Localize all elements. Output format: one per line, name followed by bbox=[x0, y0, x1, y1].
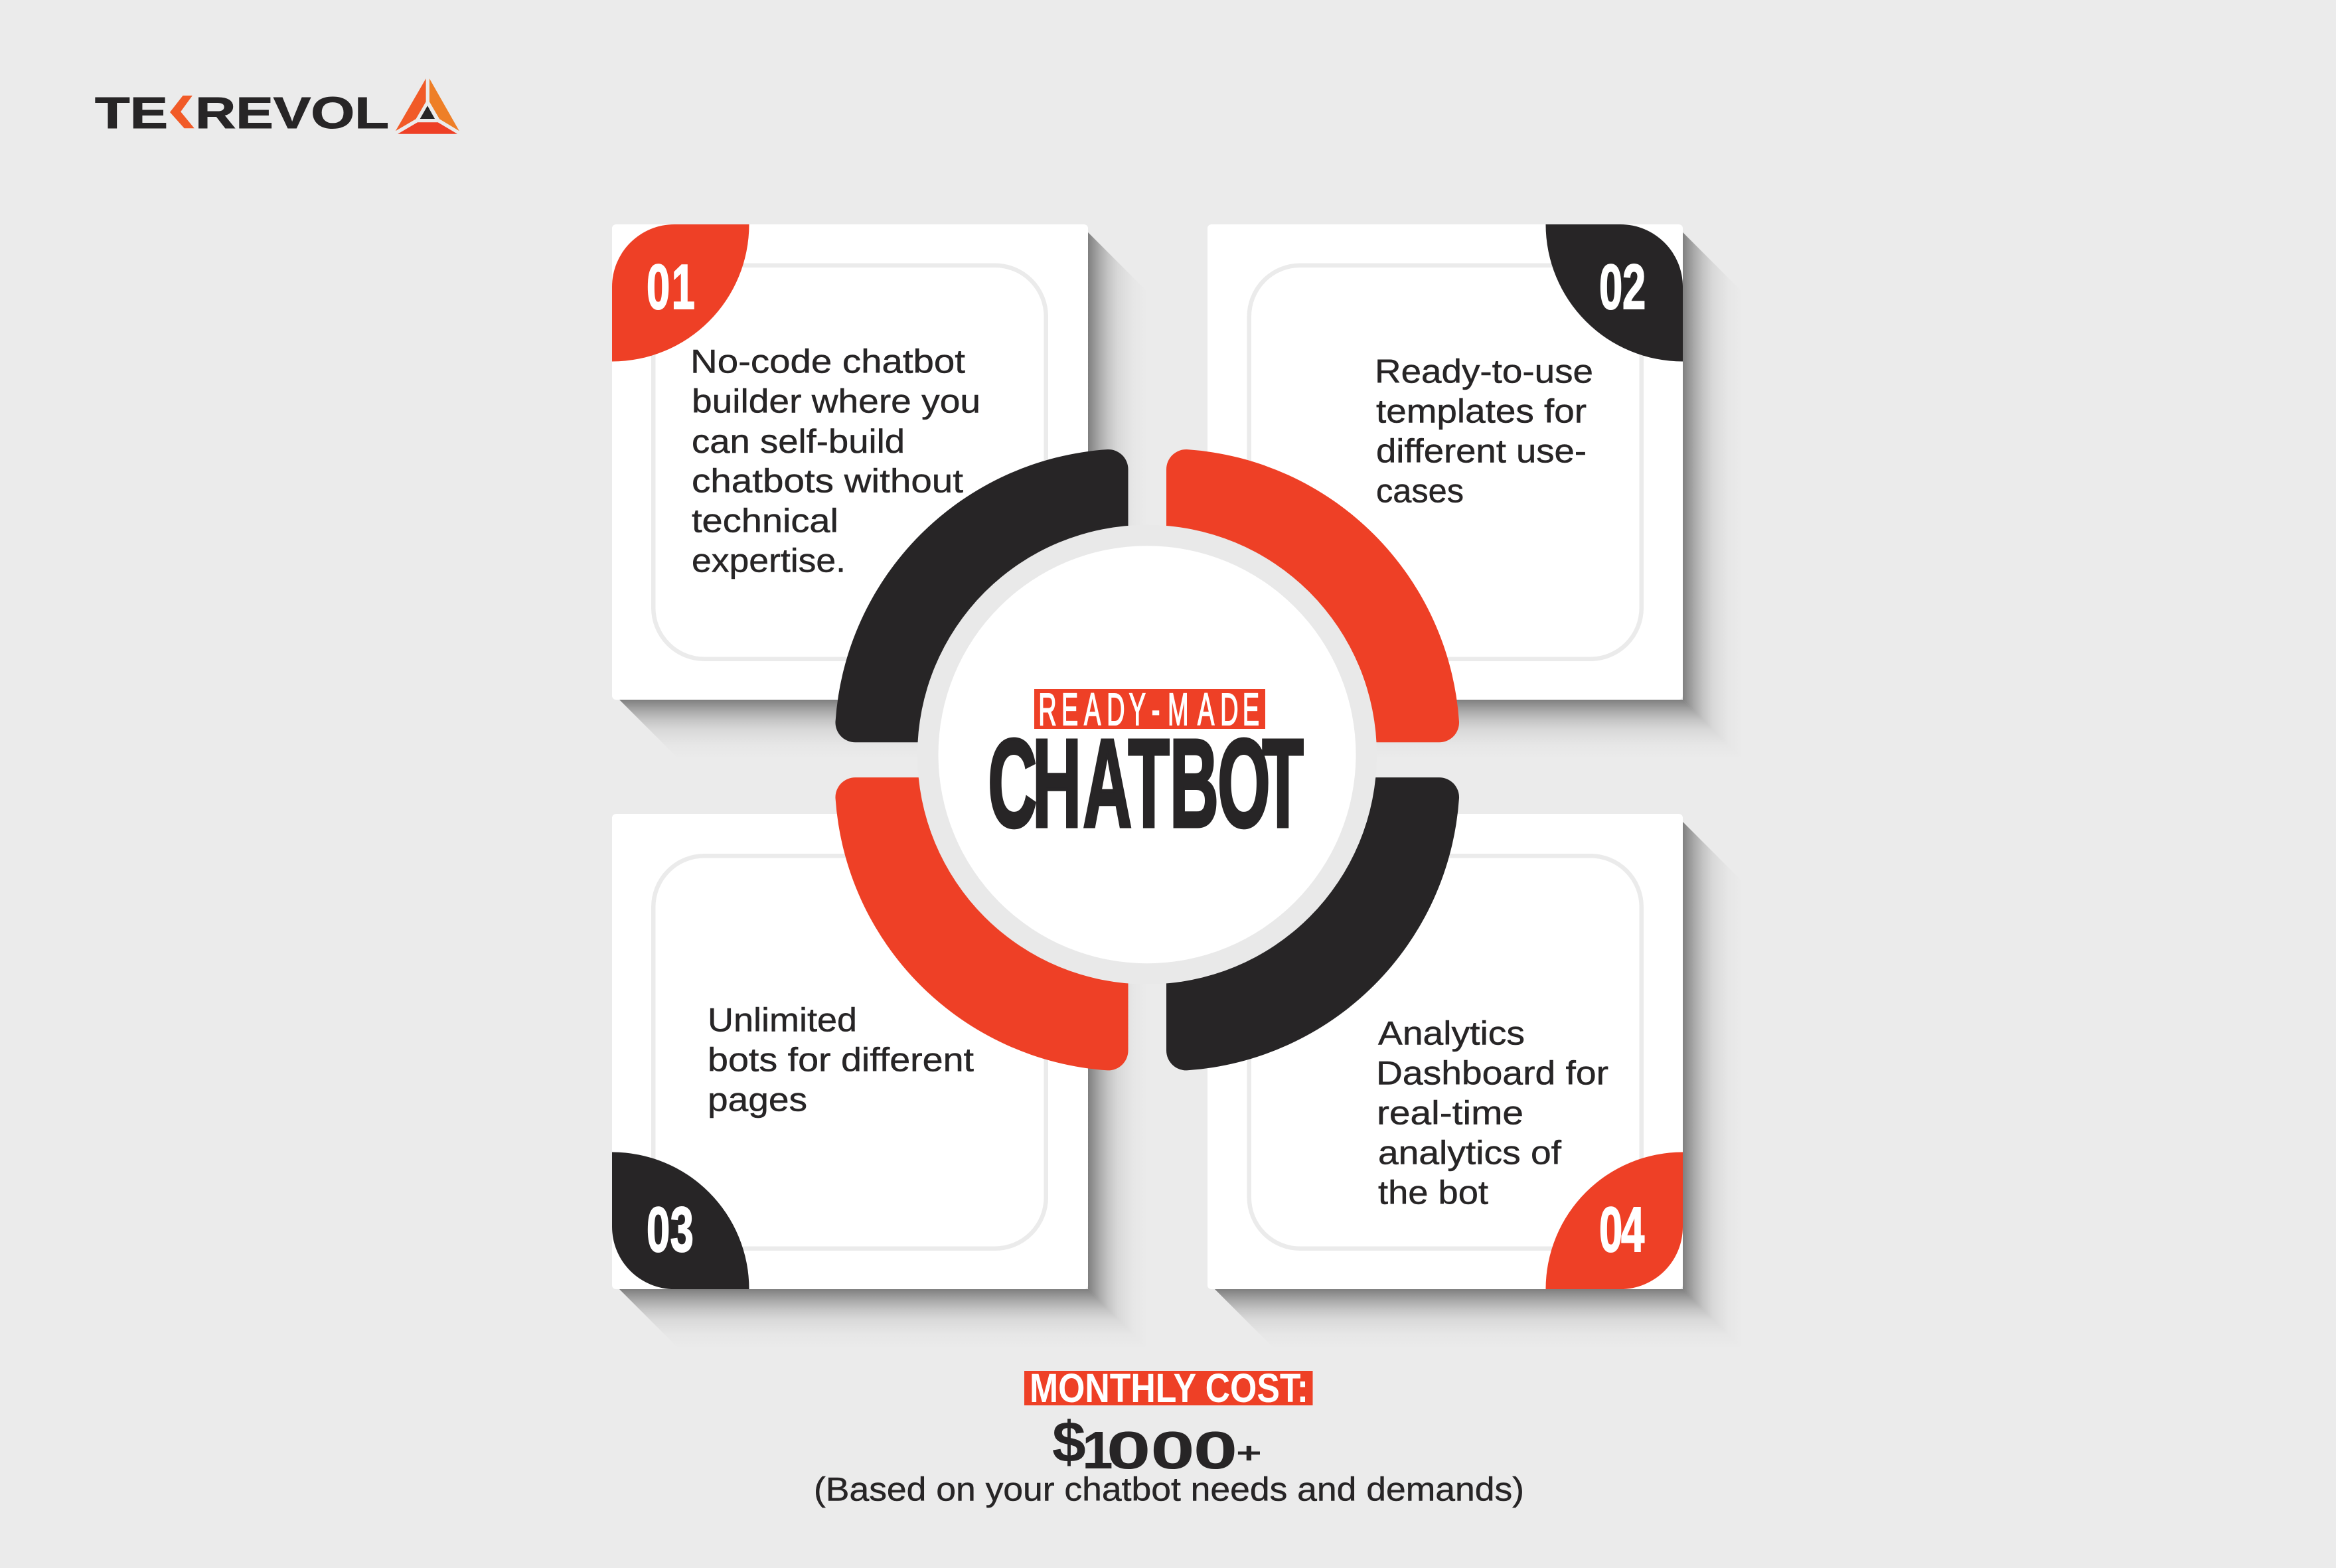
logo: Tekrevol: REVOL bbox=[195, 88, 389, 138]
badge: 03: 03 bbox=[647, 1194, 694, 1265]
text: card 1 description: No-code chatbot bbox=[690, 343, 965, 380]
text: card 4 description bbox=[1376, 1014, 1608, 1211]
label: monthly cost: MONTHLY COST: bbox=[1030, 1366, 1308, 1411]
text: card 1 description: chatbots without bbox=[692, 462, 963, 499]
text: card 1 description: technical bbox=[692, 502, 838, 539]
text: card 4 description: Dashboard for bbox=[1376, 1054, 1608, 1091]
text: card 2 description: templates for bbox=[1376, 393, 1587, 430]
center circle bbox=[917, 525, 1377, 984]
text: card 2 description bbox=[1375, 353, 1593, 510]
text: card 1 description bbox=[690, 343, 980, 579]
price: 1 bbox=[1082, 1421, 1113, 1480]
ring segment: bottom-right dark bbox=[1166, 777, 1459, 1070]
text: card 2 description: cases bbox=[1376, 473, 1464, 510]
text: card 3 description: pages bbox=[708, 1081, 807, 1118]
text: card 3 description: Unlimited bbox=[708, 1001, 857, 1038]
text: card 1 description: can self-build bbox=[692, 423, 905, 460]
badge: 04 bbox=[1545, 1152, 1683, 1289]
badge: 01 bbox=[612, 224, 749, 361]
note: (Based on your chatbot needs and demands) bbox=[814, 1471, 1524, 1508]
text: card 1 description: expertise. bbox=[692, 542, 846, 579]
text: card 1 description: builder where you bbox=[692, 382, 980, 420]
panel: card 3 bbox=[612, 814, 1148, 1349]
text: card 4 description: analytics of bbox=[1378, 1134, 1561, 1171]
heading: Ready-Made label: READY-MADE bbox=[1038, 684, 1259, 735]
text: card 2 description: Ready-to-use bbox=[1375, 353, 1593, 390]
text: card 3 description: bots for different bbox=[708, 1041, 974, 1078]
heading: Chatbot: CHATBOT bbox=[988, 714, 1304, 854]
text: card 4 description: Analytics bbox=[1378, 1014, 1525, 1052]
panel: card 4 bbox=[1207, 814, 1743, 1349]
price bbox=[1052, 1409, 1262, 1480]
text: card 3 description bbox=[708, 1001, 974, 1118]
badge: 02 bbox=[1545, 224, 1683, 361]
ring segment: bottom-left red bbox=[835, 777, 1129, 1070]
text: card 4 description: real-time bbox=[1377, 1094, 1523, 1131]
ring segment: top-right red bbox=[1166, 449, 1459, 742]
logo: Tekrevol bbox=[95, 78, 459, 138]
badge: 03 bbox=[612, 1152, 749, 1289]
panel: card 1 bbox=[612, 224, 1148, 759]
badge: 01: 01 bbox=[647, 252, 695, 323]
price: $ bbox=[1052, 1409, 1086, 1474]
cost block bbox=[814, 1366, 1524, 1508]
logo: Tekrevol: TE bbox=[95, 88, 168, 138]
badge: 02: 02 bbox=[1599, 252, 1646, 323]
text: card 2 description: different use- bbox=[1376, 433, 1587, 470]
text: card 4 description: the bot bbox=[1378, 1174, 1488, 1211]
ring segment: top-left dark bbox=[835, 449, 1129, 742]
badge: 04: 04 bbox=[1599, 1194, 1644, 1265]
panel: card 2 bbox=[1207, 224, 1743, 759]
price: + bbox=[1236, 1436, 1262, 1469]
price: 000 bbox=[1107, 1421, 1237, 1480]
